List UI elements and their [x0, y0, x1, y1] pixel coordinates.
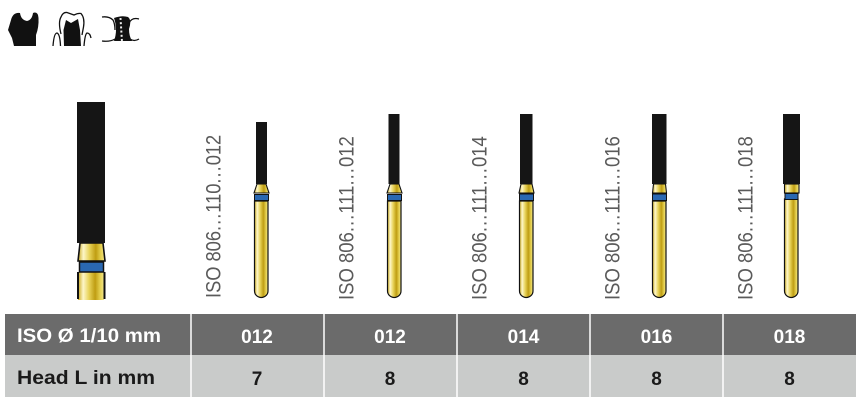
table: size data [5, 314, 856, 397]
row: ISO diameter: 018 [774, 327, 805, 348]
rotated label: ISO 806...111...016 [601, 136, 625, 300]
row: ISO diameter: ISO Ø 1/10 mm [17, 326, 161, 347]
bur 1: 806.110.012 [202, 122, 269, 298]
row: head length: 8 [784, 369, 795, 390]
icon: tooth preparation [8, 13, 39, 46]
row: ISO diameter: 012 [374, 327, 406, 348]
large bur detail [77, 102, 105, 300]
bur 2: 806.111.012 [335, 114, 402, 300]
black head [77, 102, 105, 243]
bur 5: 806.111.018 [734, 114, 800, 300]
row: head length: Head L in mm [17, 368, 155, 389]
blue ring [80, 262, 104, 272]
icon: crown on gums [53, 12, 91, 46]
bur 4: 806.111.016 [601, 114, 666, 300]
rotated label: ISO 806...111...014 [468, 136, 492, 300]
row: ISO diameter: 014 [508, 327, 540, 348]
row: ISO diameter: 012 [241, 327, 273, 348]
rotated label: ISO 806...111...012 [335, 136, 359, 300]
row: head length: 7 [252, 369, 262, 390]
row: head length [5, 355, 856, 397]
rotated label: ISO 806...110...012 [202, 135, 226, 298]
rotated label: ISO 806...111...018 [734, 136, 758, 300]
icon: interproximal with dotted line [102, 16, 139, 42]
bur shaft [78, 272, 104, 300]
row: head length: 8 [518, 369, 529, 390]
row: ISO diameter: 016 [641, 327, 672, 348]
row: ISO diameter [5, 314, 856, 355]
icons: application symbols [8, 12, 139, 46]
row: head length: 8 [385, 369, 395, 390]
gold neck [78, 243, 105, 261]
bur 3: 806.111.014 [468, 114, 534, 300]
row: head length: 8 [651, 369, 662, 390]
